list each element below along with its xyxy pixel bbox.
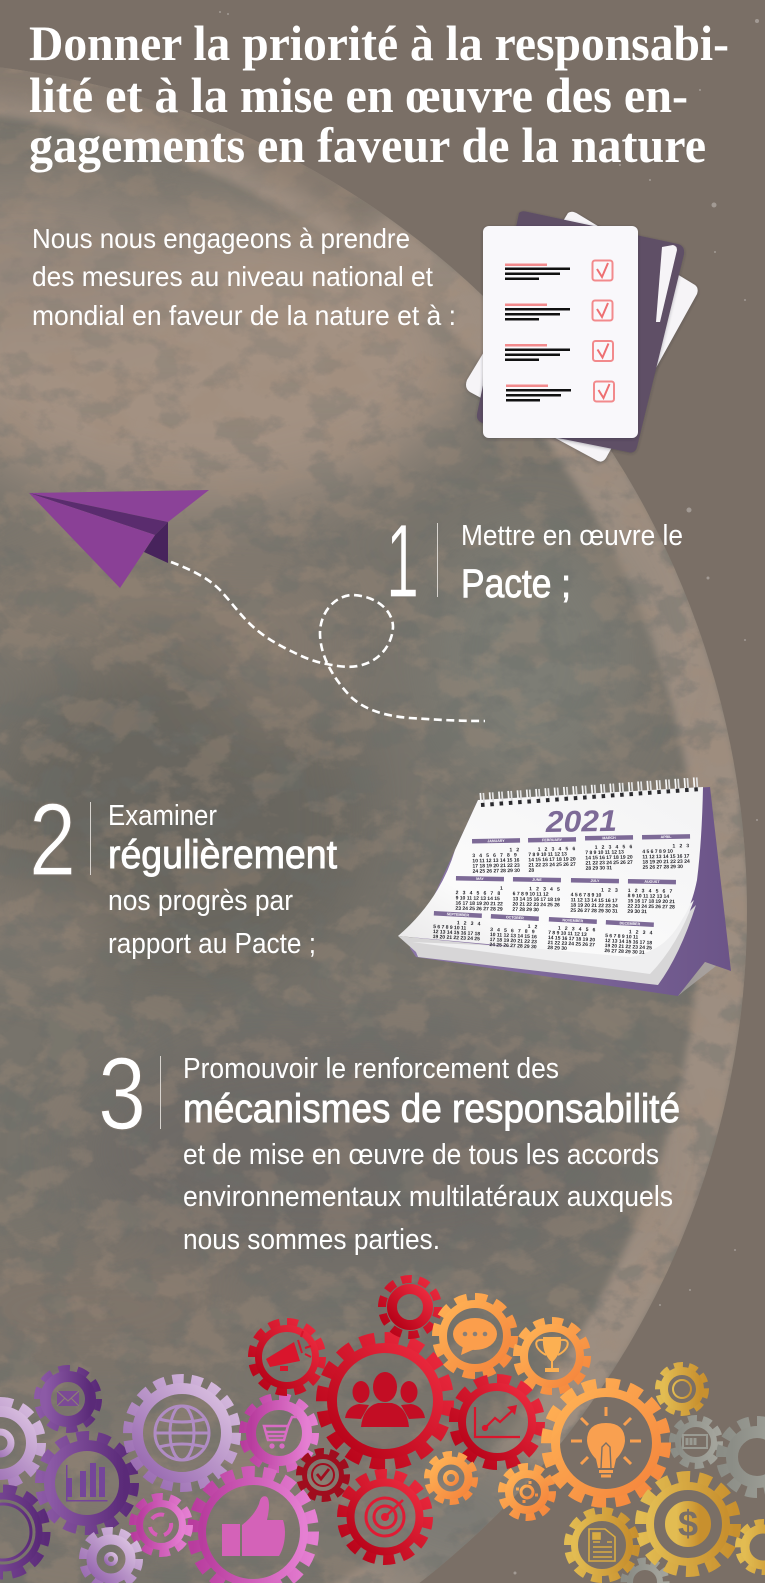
divider 3 [160,1056,161,1129]
month: August: AUGUST [644,880,660,884]
month: January: 17 18 19 20 21 22 23 [472,863,520,870]
month: November: 21 22 23 24 25 26 27 [547,940,595,948]
gear: small light target [83,1531,139,1583]
month: May: 16 17 18 19 20 21 22 [455,901,503,907]
month: September: 19 20 21 22 23 24 25 [432,934,480,942]
item 1 text: Pacte ; [461,562,571,606]
month: February: 14 15 16 17 18 19 20 [528,857,576,863]
month: July: 1 2 3 [601,888,618,894]
month: October [489,914,539,950]
month: December: 26 27 28 29 30 31 [604,948,645,956]
gear: grey bottom [624,1561,666,1583]
month: May: MAY [476,877,484,881]
month: April: 4 5 6 7 8 9 10 [642,849,673,855]
month: March: 28 29 30 31 [586,865,612,872]
month: May: 1 [500,886,503,892]
month: September: SEPTEMBER [447,912,470,917]
icon: desk calendar 2021 [398,784,731,996]
gear: globe [128,1379,236,1487]
month: April: 11 12 13 14 15 16 17 [642,854,690,860]
intro text [32,223,456,331]
icon: checklist documents [466,211,698,462]
month: April [642,834,691,871]
title [29,15,729,173]
title: gagements en faveur de la nature [29,117,706,173]
month: July: JULY [590,879,600,883]
month: December: 12 13 14 15 16 17 18 [605,938,652,946]
month: February [528,837,577,874]
month: July [570,878,619,915]
gear: battery [673,1419,719,1465]
month: September: 1 2 3 4 [457,920,481,927]
month: November [547,917,597,953]
divider 2 [90,802,91,875]
month: November: NOVEMBER [562,918,584,923]
gear: recycle [133,1497,189,1553]
gear: cart [243,1397,315,1469]
month: August: 22 23 24 25 26 27 28 [627,904,675,910]
gear: trophy [517,1321,587,1391]
gear: dollar: $ [678,1503,698,1544]
month: February: 1 2 3 4 5 6 [538,846,575,853]
intro text: Nous nous engageons à prendre [32,223,410,254]
month: December: 1 2 3 4 [629,929,653,936]
icon: paper plane [29,490,209,588]
calendar rings [480,784,703,805]
month: September [432,911,482,942]
month: December: 19 20 21 22 23 24 25 [604,943,652,951]
calendar year: 2021 [544,805,617,839]
month: January: 10 11 12 13 14 15 16 [472,858,520,864]
month: October: OCTOBER [506,915,524,920]
item 3 text [183,1053,680,1256]
month: January: 24 25 26 27 28 29 30 [473,868,520,875]
month: March [585,835,634,872]
month: December: DECEMBER [619,921,641,926]
month: August: 15 16 17 18 19 20 21 [628,898,675,905]
dashed flight path [171,562,485,721]
number 2: 2 [29,782,76,897]
month: August: 8 9 10 11 12 13 14 [628,893,669,900]
month: November: 14 15 16 17 18 19 20 [548,935,595,943]
checklist row 1 [505,260,612,280]
gear: large grey right [722,1422,765,1492]
gear: left light purple [0,1402,41,1484]
month: July: 4 5 6 7 8 9 10 [571,892,602,899]
checklist row 3 [505,341,613,361]
item 3 text: environnementaux multilatéraux auxquels [183,1181,673,1213]
month: August: 1 2 3 4 5 6 7 [628,888,673,895]
month: May: 23 24 25 26 27 28 29 [455,906,503,913]
month: January [472,838,521,875]
month: January: 3 4 5 6 7 8 9 [472,852,517,859]
gear: small orange lifebuoy [502,1467,552,1517]
divider 1 [437,523,438,597]
month: March: 7 8 9 10 11 12 13 [585,850,624,856]
item 1 [386,503,683,620]
gear: megaphone [252,1322,322,1392]
item 3 [98,1036,680,1256]
month: July: 25 26 27 28 29 30 31 [570,908,618,915]
month: January: JANUARY [487,839,505,843]
month: July: 18 19 20 21 22 23 24 [570,903,618,909]
month: June [512,877,561,914]
month: April: APRIL [661,835,672,839]
month: March: 21 22 23 24 25 26 27 [585,860,633,867]
item 3 text: mécanismes de responsabilité [183,1087,680,1131]
item 3 text: nous sommes parties. [183,1224,440,1256]
item 1 text [461,520,683,606]
gear: right gold [739,1523,765,1571]
gear: red target [342,1474,428,1560]
month: October: 17 18 19 20 21 22 23 [489,937,537,945]
number 1: 1 [386,503,419,620]
month: November: 28 29 30 [547,945,567,952]
item 3 text: Promouvoir le renforcement des [183,1053,559,1085]
item 2 text: nos progrès par [108,885,293,917]
month: October: 3 4 5 6 7 8 9 [490,927,535,935]
checklist row 4 [506,382,614,402]
month: October: 24 25 26 27 28 29 30 [489,942,537,950]
month: June: 13 14 15 16 17 18 19 [513,896,560,903]
title: lité et à la mise en œuvre des en- [29,67,688,123]
month: May [455,876,504,913]
gear: speech bubble [436,1297,514,1375]
month: February: 7 8 9 10 11 12 13 [528,852,567,858]
month: June: 27 28 29 30 [512,907,539,913]
month: November: 7 8 9 10 11 12 13 [548,930,587,938]
month: February: 21 22 23 24 25 26 27 [528,862,576,869]
gear: document [568,1511,636,1579]
month: March: 14 15 16 17 18 19 20 [585,855,633,861]
gear: bar chart [40,1436,134,1530]
gear: bottom-left ring [0,1489,46,1575]
month: July: 11 12 13 14 15 16 17 [571,897,618,904]
gear: red people [322,1338,448,1464]
gear: red line chart [454,1379,540,1465]
gear: small red top [382,1279,438,1335]
month: February: FEBRUARY [542,838,563,842]
month: October: 1 2 [527,924,538,930]
month: November: 1 2 3 4 5 6 [558,925,596,933]
item 2 [29,782,337,960]
month: June: 20 21 22 23 24 25 26 [512,902,560,908]
item 1 text: Mettre en œuvre le [461,520,683,552]
item 3 text: et de mise en œuvre de tous les accords [183,1139,659,1171]
month: June: JUNE [532,878,542,882]
item 2 text: rapport au Pacte ; [108,928,316,960]
month: December [604,920,654,956]
month: June: 1 2 3 4 5 [529,886,560,893]
month: August [627,879,676,916]
item 2 text [108,800,337,960]
month: June: 6 7 8 9 10 11 12 [513,891,549,898]
month: May: 9 10 11 12 13 14 15 [456,895,500,902]
month: September: 5 6 7 8 9 10 11 [433,924,467,932]
gear: dollar [641,1477,735,1571]
month: March: MARCH [602,836,616,840]
gears cluster [0,1279,765,1583]
month: April: 18 19 20 21 22 23 24 [642,859,690,866]
month: September: 12 13 14 15 16 17 18 [433,929,480,937]
intro text: des mesures au niveau national et [32,261,433,292]
month: August: 29 30 31 [627,909,647,915]
month: May: 2 3 4 5 6 7 8 [456,890,500,897]
month: October: 10 11 12 13 14 15 16 [490,932,537,940]
gear: small gold [659,1366,705,1412]
month: April: 25 26 27 28 29 30 [643,864,683,871]
month: March: 1 2 3 4 5 6 [595,844,632,851]
number 3: 3 [98,1036,146,1151]
item 2 text: régulièrement [108,833,337,877]
month: February: 28 [529,868,534,874]
item 2 text: Examiner [108,800,217,832]
gear: envelope [38,1369,98,1429]
checklist row 2 [505,300,612,320]
month: December: 5 6 7 8 9 10 11 [605,933,639,941]
month: April: 1 2 3 [672,843,689,849]
month: January: 1 2 [509,847,519,853]
title: Donner la priorité à la responsabi- [29,15,729,71]
gear: thumb up [193,1472,313,1583]
gear: light bulb [547,1384,665,1502]
gear: small orange target [428,1455,474,1501]
gear: check [300,1452,346,1498]
intro text: mondial en faveur de la nature et à : [32,300,456,331]
